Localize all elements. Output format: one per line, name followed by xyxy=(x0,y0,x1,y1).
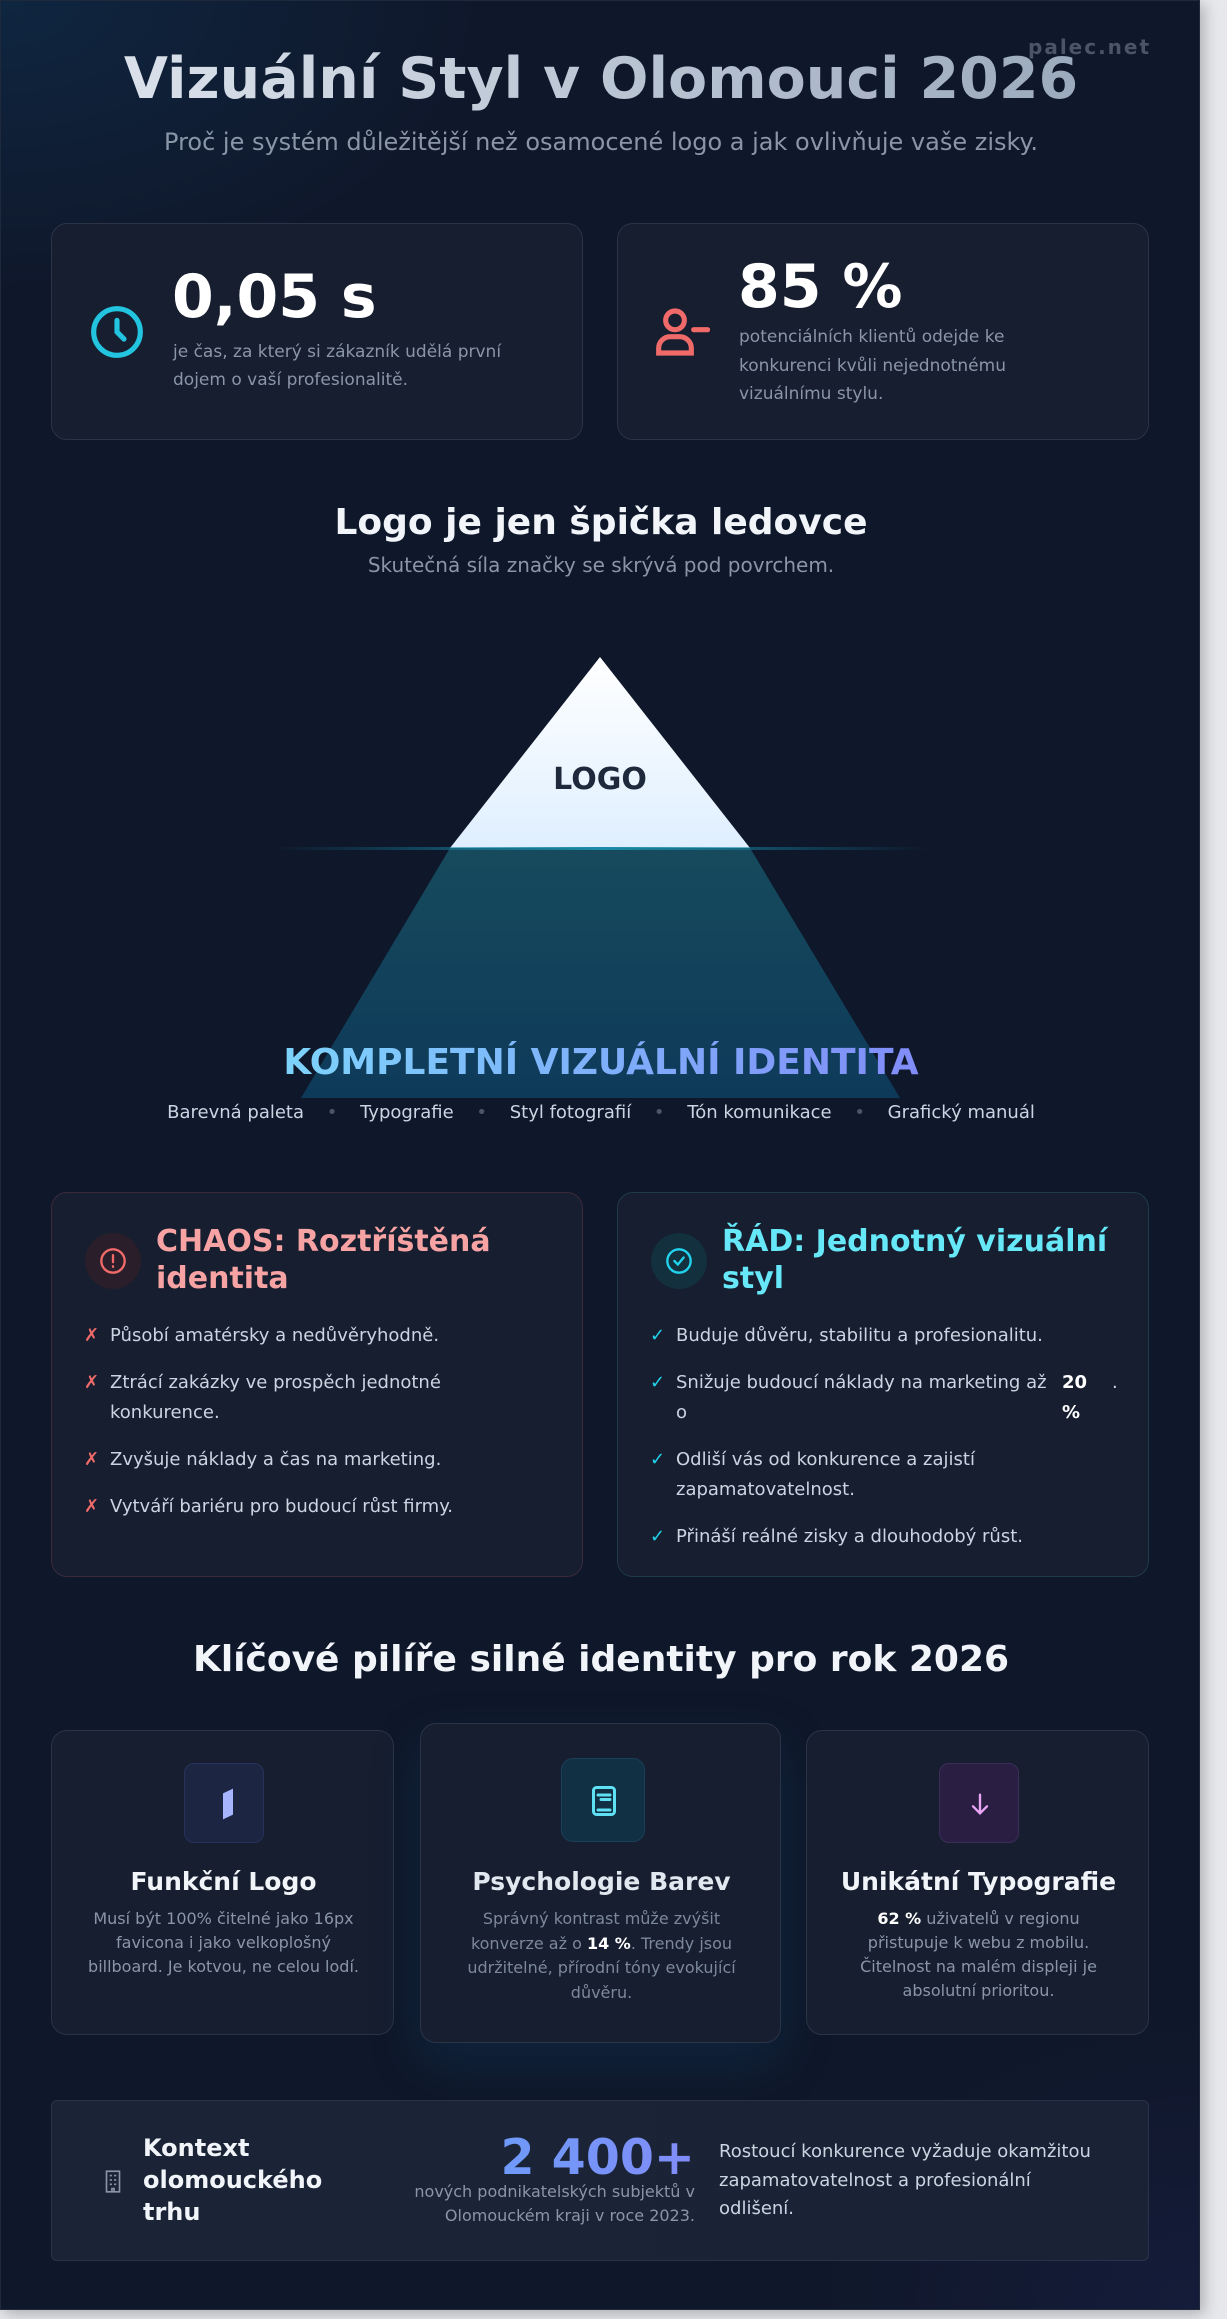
chaos heading: CHAOS: Roztříštěná identita xyxy=(156,1224,491,1296)
watermark: palec.net xyxy=(1028,35,1151,59)
order list: ✓ xyxy=(650,1325,665,1346)
stat card: 85 % xyxy=(617,223,1149,440)
heading: pillars: Klíčové pilíře silné identity pro rok 2026 xyxy=(193,1639,1009,1680)
title: Vizuální Styl v Olomouci 2026 xyxy=(124,46,1078,112)
icon: building xyxy=(106,2170,120,2193)
subtitle: Proč je systém důležitější než osamocené logo a jak ovlivňuje vaše zisky. xyxy=(164,128,1038,156)
order list: Buduje důvěru, stabilitu a profesionalitu. xyxy=(676,1325,1043,1346)
chaos list: Ztrácí zakázky ve prospěch jednotné konkurence. xyxy=(110,1372,441,1423)
order list: Snižuje budoucí náklady na marketing až o xyxy=(676,1372,1047,1423)
iceberg subheading: Skutečná síla značky se skrývá pod povrchem. xyxy=(368,553,834,577)
icon box xyxy=(939,1763,1019,1843)
chaos list: ✗ xyxy=(84,1372,99,1393)
chaos list xyxy=(84,1325,453,1517)
pillar: typography xyxy=(806,1730,1149,2035)
icon: alert xyxy=(85,1233,141,1289)
context heading: Kontext olomouckého trhu xyxy=(143,2134,322,2226)
chaos list: Zvyšuje náklady a čas na marketing. xyxy=(110,1449,441,1470)
order list: . xyxy=(1112,1372,1118,1393)
icon: check xyxy=(651,1233,707,1289)
chaos list: ✗ xyxy=(84,1325,99,1346)
stat card: 0,05 s xyxy=(51,223,583,440)
stat number: 0,05 s xyxy=(172,262,377,332)
iceberg diagram xyxy=(283,657,919,1098)
logo label: LOGO xyxy=(553,762,647,797)
order heading: ŘÁD: Jednotný vizuální styl xyxy=(722,1224,1107,1296)
context text xyxy=(719,2141,1091,2219)
big number: 2 400+ xyxy=(500,2129,695,2186)
pillar title: Psychologie Barev xyxy=(472,1867,731,1896)
identity label: KOMPLETNÍ VIZUÁLNÍ IDENTITA xyxy=(283,1041,919,1083)
chaos list: Vytváří bariéru pro budoucí růst firmy. xyxy=(110,1496,453,1517)
pillar: color psychology xyxy=(420,1723,781,2043)
stat description: je čas, za který si zákazník udělá první dojem o vaší profesionalitě. xyxy=(173,342,501,390)
context text: zapamatovatelnost a profesionální xyxy=(719,2170,1031,2190)
icon box xyxy=(561,1758,645,1842)
heading: iceberg: Logo je jen špička ledovce xyxy=(334,502,868,543)
identity items: Barevná paleta • Typografie • Styl fotografií • Tón komunikace • Grafický manuál xyxy=(167,1102,1035,1123)
icon: clock xyxy=(91,306,143,358)
pillar title: Funkční Logo xyxy=(130,1867,317,1896)
order list: Přináší reálné zisky a dlouhodobý růst. xyxy=(676,1526,1023,1547)
order list: Odliší vás od konkurence a zajistí zapamatovatelnost. xyxy=(676,1449,975,1500)
order list: ✓ xyxy=(650,1526,665,1547)
pillar title: Unikátní Typografie xyxy=(841,1867,1116,1896)
context text: Rostoucí konkurence vyžaduje okamžitou xyxy=(719,2141,1091,2162)
panel: order xyxy=(617,1192,1149,1577)
big number xyxy=(352,2129,695,2186)
number caption: nových podnikatelských subjektů v Olomouckém kraji v roce 2023. xyxy=(414,2182,695,2225)
pillar text: Musí být 100% čitelné jako 16px favicona i jako velkoplošný billboard. Je kotvou, ne celou lodí. xyxy=(88,1909,359,1976)
stat description: potenciálních klientů odejde ke konkurenci kvůli nejednotnému vizuálnímu stylu. xyxy=(739,327,1006,404)
chaos list: ✗ xyxy=(84,1449,99,1470)
underwater part xyxy=(301,848,900,1098)
tip of iceberg xyxy=(450,657,750,848)
order list: ✓ xyxy=(650,1372,665,1393)
pillar: functional logo xyxy=(51,1730,394,2035)
icon: user leaving xyxy=(656,308,710,356)
order list xyxy=(650,1325,1118,1547)
panel: chaos xyxy=(51,1192,583,1577)
pillar text: Správný kontrast může zvýšit konverze až o 14 %. Trendy jsou udržitelné, přírodní tóny evokující důvěru. xyxy=(467,1909,736,2002)
stat number: 85 % xyxy=(738,252,903,322)
panel: market context xyxy=(51,2100,1149,2261)
order list: ✓ xyxy=(650,1449,665,1470)
context text: odlišení. xyxy=(719,2198,794,2219)
chaos list: Působí amatérsky a nedůvěryhodně. xyxy=(110,1325,439,1346)
order list: 20 % xyxy=(1062,1372,1087,1423)
icon box xyxy=(184,1763,264,1843)
waterline xyxy=(271,847,931,850)
chaos list: ✗ xyxy=(84,1496,99,1517)
pillar text: 62 % uživatelů v regionu přistupuje k webu z mobilu. Čitelnost na malém displeji je absolutní prioritou. xyxy=(860,1909,1097,2000)
